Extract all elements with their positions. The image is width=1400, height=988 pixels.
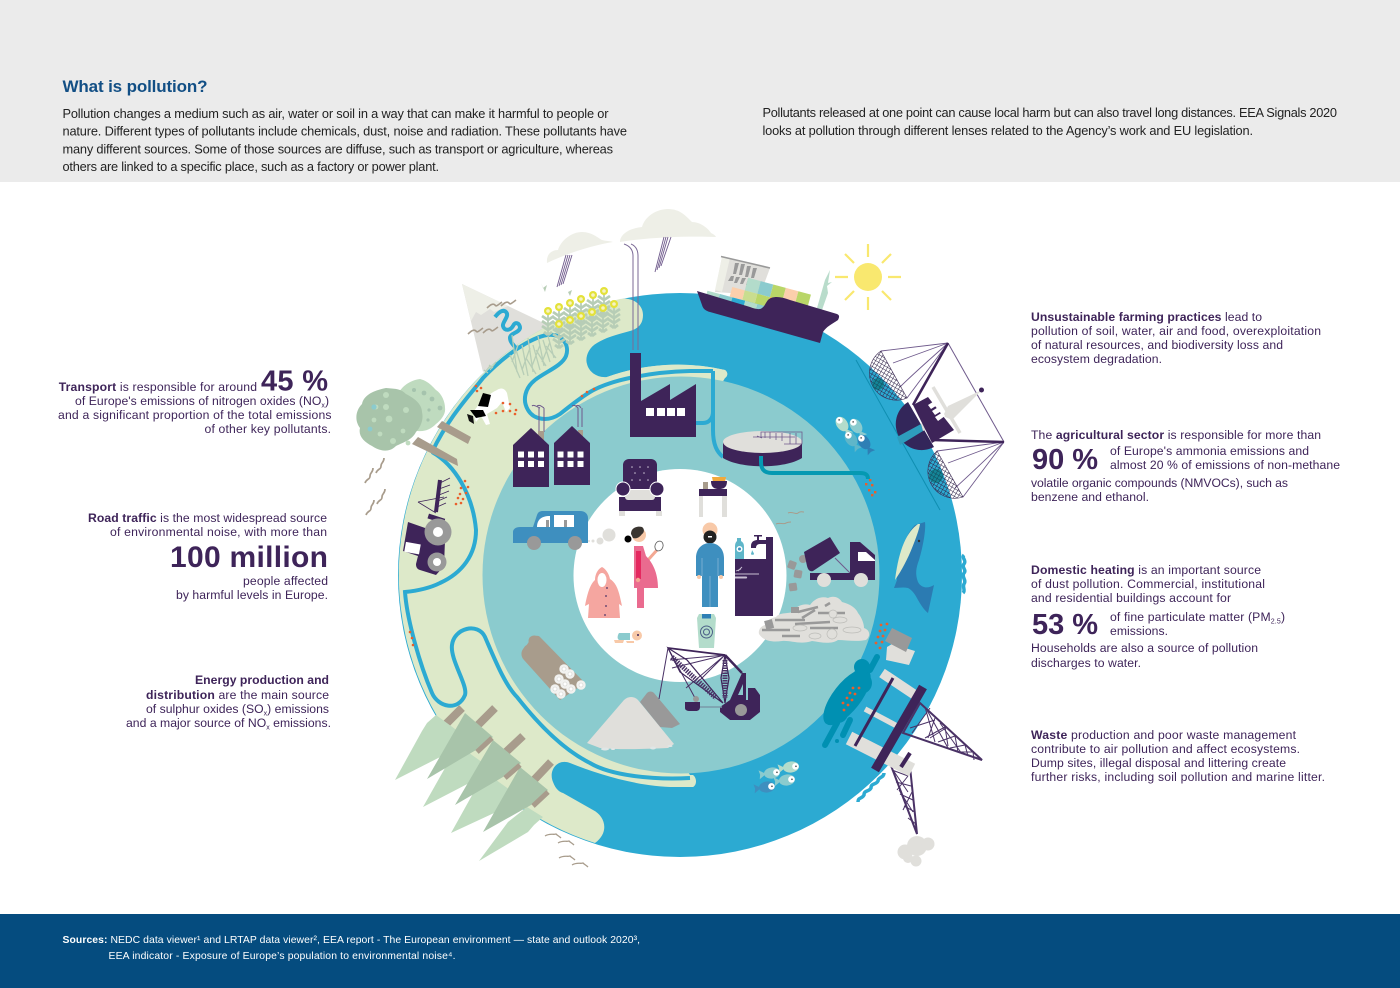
circular diagram bbox=[356, 209, 1004, 867]
reeds bbox=[484, 335, 556, 378]
sand and gravel piles bbox=[587, 692, 680, 750]
ocean ring bbox=[398, 293, 962, 857]
container ship bbox=[697, 256, 839, 343]
text: waste: contribute to air pollution and affect ecosystems. bbox=[1031, 742, 1300, 756]
tipper truck bbox=[787, 537, 875, 592]
sun bbox=[835, 244, 901, 310]
car bbox=[513, 511, 588, 550]
text: energy: Energy production and bbox=[195, 673, 329, 687]
exhaust cloud bbox=[588, 528, 616, 544]
text: energy: x bbox=[266, 724, 270, 732]
factory bbox=[624, 244, 696, 437]
wind squiggles bbox=[365, 458, 385, 515]
stat: 53 percent: 53 % bbox=[1032, 609, 1098, 641]
text: farming: ecosystem degradation. bbox=[1031, 352, 1162, 366]
text: waste: Dump sites, illegal disposal and littering create bbox=[1031, 756, 1286, 770]
sources text: EEA indicator - Exposure of Europe’s population to environmental noise⁴. bbox=[108, 951, 456, 962]
side table with food bbox=[699, 477, 727, 517]
text: farming: pollution of soil, water, air and food, overexploitation bbox=[1031, 324, 1321, 338]
text: energy: x bbox=[264, 710, 268, 718]
oil spill bbox=[815, 657, 879, 745]
intro text right: looks at pollution through different lenses related to the Agency’s work and EU legislation. bbox=[762, 123, 1253, 138]
sink and kitchen unit with bottle bbox=[735, 535, 773, 616]
text: energy: emissions. bbox=[270, 716, 331, 730]
intro text right: Pollutants released at one point can cause local harm but can also travel long distances. EEA Signals 2020 bbox=[762, 105, 1337, 120]
recycling bin bbox=[697, 614, 716, 648]
land crescent bbox=[399, 299, 727, 843]
treatment tank bbox=[723, 431, 868, 479]
text: agriculture: The agricultural sector is responsible for more than bbox=[1031, 428, 1321, 442]
waste heap bbox=[759, 597, 869, 643]
text: agriculture: of Europe's ammonia emissions and bbox=[1110, 444, 1309, 458]
footer panel bbox=[0, 914, 1400, 988]
soil patches bbox=[875, 623, 915, 665]
text: domestic heating: Domestic heating is an important source bbox=[1031, 563, 1261, 577]
text: domestic heating: and residential buildings account for bbox=[1031, 591, 1231, 605]
text: energy: and a major source of NO bbox=[126, 716, 266, 730]
text: energy: of sulphur oxides (SO bbox=[146, 702, 264, 716]
header panel bbox=[0, 0, 1400, 182]
text: waste: further risks, including soil pollution and marine litter. bbox=[1031, 770, 1325, 784]
intro text left: others are linked to a specific place, such as a factory or power plant. bbox=[62, 159, 439, 174]
text: transport: of other key pollutants. bbox=[204, 422, 331, 436]
whale bbox=[894, 522, 934, 613]
fish school upper bbox=[833, 414, 876, 456]
crawling baby bbox=[614, 630, 642, 643]
man with beard bbox=[696, 522, 724, 607]
insects bbox=[541, 283, 572, 296]
white centre bbox=[574, 469, 786, 682]
cow bbox=[467, 389, 510, 425]
text: transport: Transport is responsible for around bbox=[59, 380, 257, 394]
sources text bbox=[62, 935, 640, 962]
intro text left: many different sources. Some of those sources are diffuse, such as transport or agriculture, whereas bbox=[62, 142, 613, 156]
stat: 90 percent: 90 % bbox=[1032, 444, 1098, 476]
waves on coast bbox=[858, 555, 965, 802]
mining excavator bbox=[659, 648, 760, 720]
river bbox=[405, 311, 723, 778]
houses bbox=[513, 405, 590, 487]
text: farming: of natural resources, and biodiversity loss and bbox=[1031, 338, 1283, 352]
agricultural run-off dots bbox=[409, 385, 595, 646]
intro text left: nature. Different types of pollutants include chemicals, dust, noise and radiation. These pollutants have bbox=[62, 124, 627, 138]
heading: what is pollution: What is pollution? bbox=[62, 77, 208, 96]
crop flowers bbox=[542, 287, 620, 348]
trawler bbox=[856, 343, 1004, 510]
birds on ring bbox=[776, 512, 804, 524]
fish school lower bbox=[753, 760, 800, 794]
text: domestic heating: of dust pollution. Commercial, institutional bbox=[1031, 577, 1265, 591]
land strip over ring bbox=[607, 365, 727, 379]
stat: 45 percent: 45 % bbox=[261, 366, 328, 398]
text: domestic heating: emissions. bbox=[1110, 624, 1168, 638]
clouds and rain bbox=[547, 209, 716, 287]
text: agriculture: volatile organic compounds (NMVOCs), such as bbox=[1031, 476, 1288, 490]
sources text: Sources: NEDC data viewer¹ and LRTAP data viewer², EEA report - The European environment — state and outlook 2020³, bbox=[62, 935, 640, 946]
pregnant woman bbox=[624, 527, 664, 608]
text: waste bbox=[1031, 728, 1325, 784]
text: transport: x bbox=[321, 402, 325, 410]
text: transport: ) bbox=[325, 394, 329, 408]
text: farming bbox=[1031, 310, 1321, 366]
text: energy: distribution are the main source bbox=[146, 688, 329, 702]
trees bbox=[356, 379, 471, 466]
text: road traffic: by harmful levels in Europe. bbox=[176, 588, 328, 602]
tractor with plough bbox=[403, 478, 452, 575]
intro text right bbox=[762, 105, 1337, 138]
text: agriculture bbox=[1031, 428, 1340, 504]
text: domestic heating: of fine particulate matter (PM bbox=[1110, 610, 1271, 624]
text: domestic heating: Households are also a source of pollution bbox=[1031, 641, 1258, 655]
text: energy bbox=[126, 673, 331, 732]
text: farming: Unsustainable farming practices lead to bbox=[1031, 310, 1262, 324]
text: transport bbox=[58, 366, 332, 436]
armchair bbox=[616, 459, 664, 516]
oil rig bbox=[849, 673, 982, 834]
text: domestic heating bbox=[1031, 563, 1285, 670]
text: road traffic bbox=[88, 511, 328, 602]
text: road traffic: Road traffic is the most widespread source bbox=[88, 511, 327, 525]
text: transport: of Europe's emissions of nitrogen oxides (NO bbox=[75, 394, 321, 408]
smoke from rig bbox=[898, 836, 934, 866]
stacked logs bbox=[521, 636, 586, 700]
text: domestic heating: ) bbox=[1281, 610, 1285, 624]
mountain bbox=[462, 284, 550, 372]
text: road traffic: of environmental noise, with more than bbox=[110, 525, 327, 539]
text: transport: and a significant proportion of the total emissions bbox=[58, 408, 332, 422]
text: energy: ) emissions bbox=[267, 702, 329, 716]
text: domestic heating: 2.5 bbox=[1271, 618, 1281, 626]
intro text left: Pollution changes a medium such as air, water or soil in a way that can make it harmful to people or bbox=[62, 106, 609, 121]
conifer forest bbox=[395, 708, 551, 861]
intro text left bbox=[62, 106, 627, 174]
child raincoat bbox=[585, 567, 622, 618]
stat: 100 million: 100 million bbox=[170, 541, 328, 574]
text: agriculture: benzene and ethanol. bbox=[1031, 490, 1149, 504]
discharge dots bbox=[865, 479, 876, 496]
text: waste: Waste production and poor waste management bbox=[1031, 728, 1297, 742]
birds upper left bbox=[468, 300, 516, 334]
text: agriculture: almost 20 % of emissions of non-methane bbox=[1110, 458, 1340, 472]
teal inner ring bbox=[482, 376, 880, 774]
text: road traffic: people affected bbox=[243, 574, 328, 588]
birds lower left bbox=[545, 834, 588, 867]
text: domestic heating: discharges to water. bbox=[1031, 656, 1141, 670]
